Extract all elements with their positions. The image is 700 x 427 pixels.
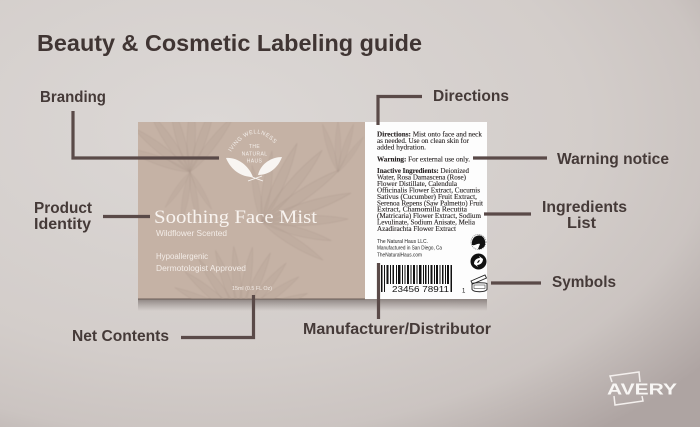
manufacturer text: The Natural Haus LLC. [377, 239, 428, 245]
ingredients text: Officinalis Flower Extract, Cucumis [377, 186, 480, 194]
logo: HAUS [247, 158, 263, 164]
ingredients text: Serenoa Repens (Saw Palmetto) Fruit [377, 200, 483, 208]
callout: directions: Directions [433, 88, 509, 105]
ingredients text: Extract, Chamomilla Recutita [377, 206, 468, 214]
callout: branding [40, 89, 219, 158]
logo [226, 130, 282, 182]
logo: Avery [607, 372, 677, 405]
claims: Dermotologist Approved [156, 264, 246, 273]
callout: symbols: Symbols [552, 274, 616, 291]
ingredients text: Inactive Ingredients: Deionized [377, 167, 469, 175]
callout: warning notice: Warning notice [557, 151, 669, 168]
manufacturer text: Manufactured in San Diego, Ca [377, 246, 442, 252]
net contents: 15ml (0.5 FL Oz) [232, 286, 272, 292]
logo: Avery: AVERY [607, 382, 677, 398]
ingredients text: Flower Distillate, Calendula [377, 180, 458, 188]
icon: symbol one [471, 234, 486, 250]
warning text: Warning: For external use only. [377, 156, 470, 164]
callout: manufacturer/distributor: Manufacturer/Distributor [303, 321, 491, 338]
callout: branding: Branding [40, 89, 106, 106]
manufacturer text: TheNaturalHaus.com [377, 252, 422, 258]
logo: THE [249, 144, 260, 150]
barcode: 1 [462, 288, 466, 294]
callout: product identity: Identity [34, 216, 91, 233]
logo: IVING WELLNESS [228, 130, 276, 152]
product name: Soothing Face Mist [154, 207, 318, 228]
directions text: as needed. Use on clean skin for [377, 137, 470, 145]
claims [156, 252, 246, 273]
ingredients text: Levulinate, Sodium Anisate, Melia [377, 218, 476, 226]
ingredients text: Sativus (Cucumber) Fruit Extract, [377, 193, 477, 201]
ingredients text: Azadirachta Flower Extract [377, 225, 456, 233]
ingredients text: (Matricaria) Flower Extract, Sodium [377, 212, 481, 220]
callout: product identity [34, 200, 150, 233]
callout: net contents: Net Contents [72, 328, 169, 345]
ingredients text [377, 167, 483, 233]
logo: NATURAL [242, 152, 267, 158]
scent: Wildflower Scented [156, 229, 227, 238]
callout: product identity: Product [34, 200, 92, 217]
callout: net contents [72, 295, 254, 345]
callout: ingredients list: List [567, 215, 596, 232]
panel: label back [365, 122, 487, 299]
barcode: 23456 78911 [392, 285, 450, 294]
panel: label front [138, 122, 365, 300]
directions text: Directions: Mist onto face and neck [377, 130, 482, 138]
ingredients text: Water, Rosa Damascena (Rose) [377, 174, 467, 182]
callout: ingredients list [484, 199, 627, 232]
icon: recycling symbol [470, 254, 486, 270]
callout: symbols [491, 274, 616, 291]
callout: directions [378, 88, 509, 125]
callout: ingredients list: Ingredients [542, 199, 627, 216]
claims: Hypoallergenic [156, 252, 208, 261]
panel: label drop shadow [138, 299, 487, 311]
directions text [377, 130, 482, 152]
directions text: added hydration. [377, 144, 426, 152]
title: Beauty & Cosmetic Labeling guide [37, 30, 422, 56]
manufacturer text [377, 239, 442, 258]
barcode [381, 265, 466, 294]
decorative botanical illustration [168, 142, 350, 299]
icon: open jar [471, 275, 487, 292]
